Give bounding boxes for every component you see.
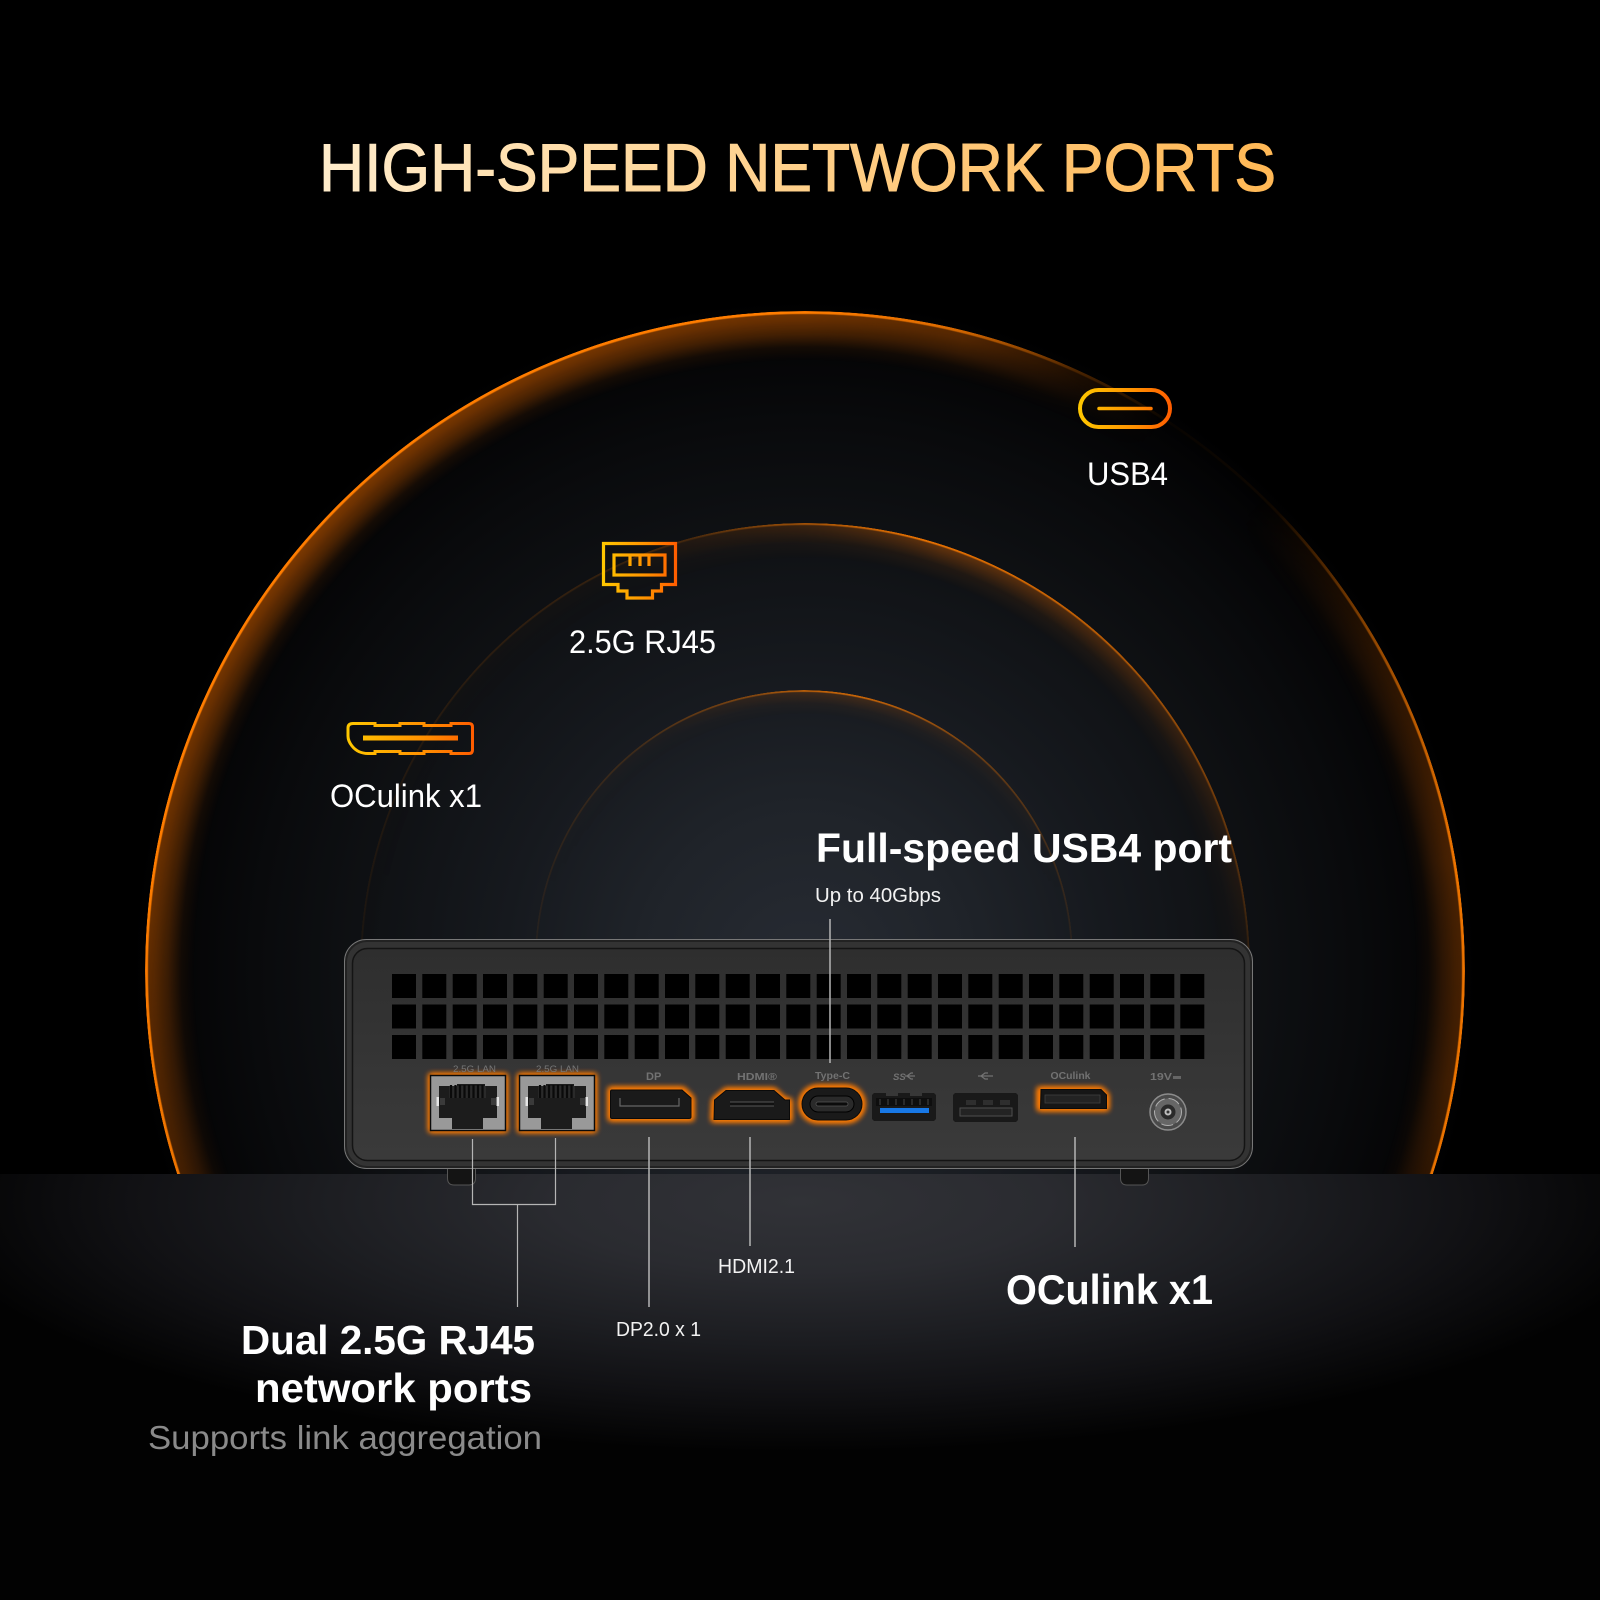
middle arc: rim line [361,523,1250,949]
label: 2.5G RJ45: 2.5G RJ45 [569,624,716,660]
port: 19V DC: 19V [1150,1071,1172,1083]
port: DisplayPort: DP [646,1071,661,1083]
callout: Full-speed USB4 port: Full-speed USB4 port [816,825,1232,871]
middle arc: wide glow [628,523,1249,944]
port: DisplayPort [610,1071,692,1119]
port: LAN 2: 2.5G LAN [536,1064,579,1075]
callout: DP2.0 x 1: DP2.0 x 1 [616,1319,701,1341]
port: LAN 2 [518,1064,596,1132]
leader lines [472,919,1075,1307]
port: LAN 1 [429,1064,507,1132]
port: USB 3: SS [893,1072,906,1083]
callout: OCulink x1 bottom: OCulink x1 [1006,1266,1213,1313]
outer arc: wide glow [145,311,1465,1174]
port: HDMI: HDMI® [737,1072,778,1083]
label: OCulink x1 top: OCulink x1 [330,778,482,814]
callout sub: Supports link aggregation: Supports link aggregation [148,1419,542,1456]
port: USB 3 [872,1072,936,1121]
port: USB4 Type-C: Type-C [815,1070,850,1082]
callout: Dual 2.5G RJ45 [241,1317,535,1411]
inner arc: glow [675,690,1023,806]
icon: USB4 [1080,390,1170,427]
floor surface [0,1174,1600,1600]
callout: Dual 2.5G RJ45: Dual 2.5G RJ45 [241,1317,535,1363]
device feet [448,1166,1148,1185]
port: OCulink: OCulink [1050,1070,1091,1082]
callout sub: Up to 40Gbps: Up to 40Gbps [815,885,941,907]
port: LAN 1: 2.5G LAN [453,1064,496,1075]
icon: RJ45 [604,544,676,598]
port: USB4 Type-C [801,1070,863,1121]
vent grid [392,974,1204,1059]
inner arc: rim line [536,690,1072,939]
port: HDMI [713,1072,790,1120]
port: OCulink [1039,1070,1107,1109]
background radial glow behind the arcs [0,0,1600,1174]
outer arc: bright rim line [145,311,1465,1174]
callout: HDMI2.1: HDMI2.1 [718,1256,795,1278]
title: HIGH-SPEED NETWORK PORTS [319,130,1276,206]
device: mini PC rear panel [344,940,1252,1168]
label: USB4: USB4 [1087,456,1168,492]
port: 19V DC [1150,1071,1186,1130]
port: USB 2 [953,1073,1018,1122]
icon: OCulink [348,724,472,754]
callout: Dual 2.5G RJ45: network ports [255,1365,532,1411]
